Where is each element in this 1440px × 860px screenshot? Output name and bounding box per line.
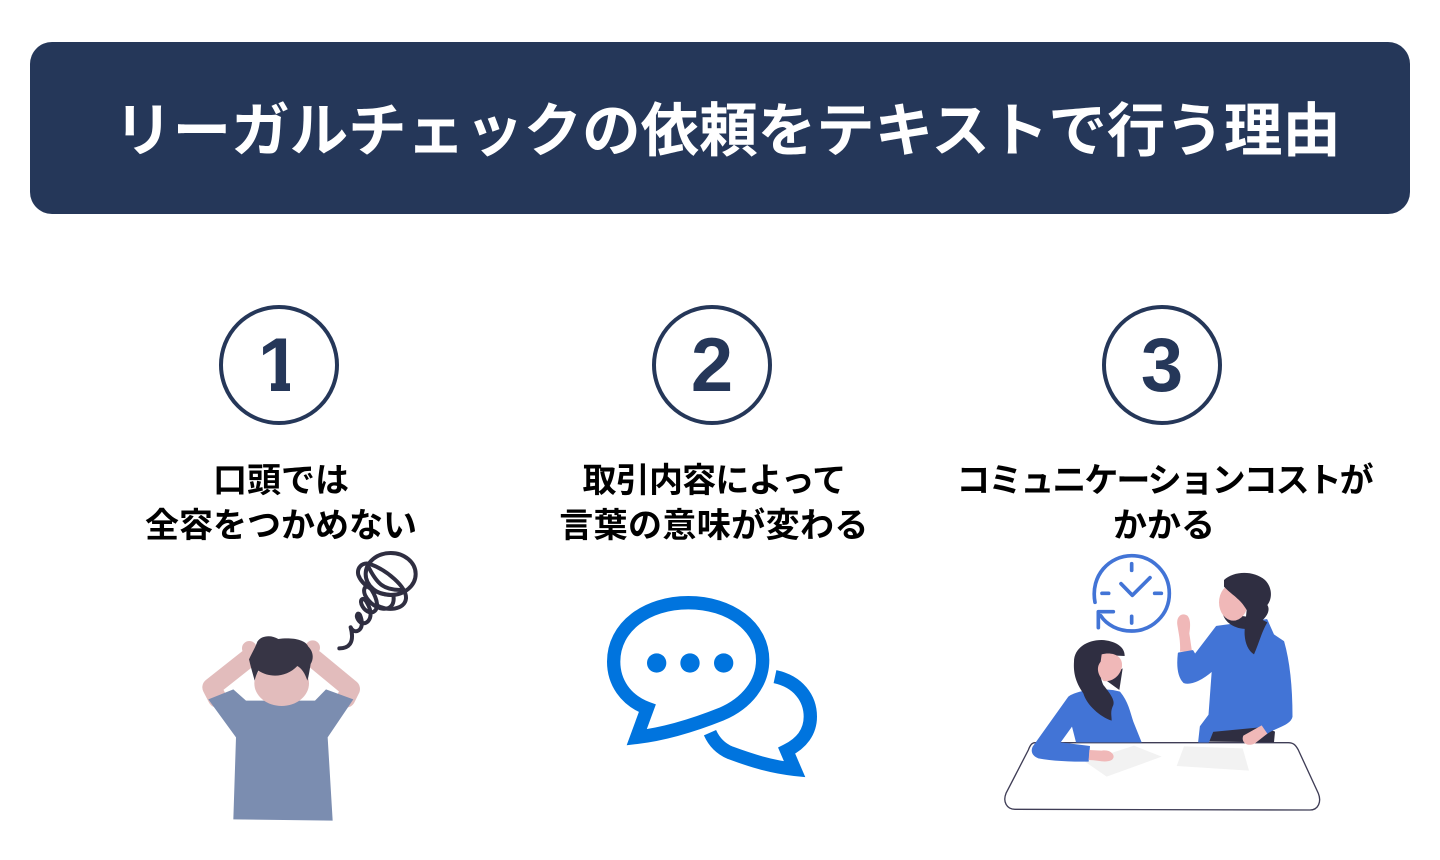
table: [1005, 743, 1320, 810]
number badge 3: 3: [1141, 323, 1183, 408]
legs: [1208, 725, 1275, 742]
number badge 1: 1: [258, 323, 300, 408]
label 2: [559, 462, 869, 545]
large bubble: [614, 603, 763, 737]
hand: [1243, 725, 1267, 745]
icon: speech bubbles: [614, 603, 810, 769]
label 3: かかる: [1113, 507, 1215, 545]
face: [1098, 653, 1122, 681]
label 1: [145, 462, 417, 545]
neck hair: [1223, 613, 1253, 629]
number badge 2: 2: [691, 323, 733, 408]
hand: [1089, 750, 1114, 761]
title banner: [30, 42, 1410, 214]
dots: [647, 653, 733, 673]
hands: [242, 640, 320, 656]
arms: [212, 658, 351, 698]
standing woman: [1177, 573, 1292, 745]
raised hand: [1177, 614, 1192, 652]
scribble: [339, 553, 416, 648]
body: [1178, 620, 1292, 742]
label 1: 全容をつかめない: [145, 507, 417, 545]
clock: [1094, 556, 1169, 631]
title: リーガルチェックの依頼をテキストで行う理由: [114, 99, 1341, 164]
face: [254, 661, 309, 706]
shirt: [208, 689, 353, 821]
icon: confused person: [208, 553, 416, 821]
label 2: 取引内容によって: [583, 462, 845, 500]
number badge 3: [1102, 305, 1222, 425]
hair: [1074, 640, 1125, 721]
neck hair: [1103, 668, 1123, 690]
label 2: 言葉の意味が変わる: [559, 507, 869, 545]
number badge 2: [652, 305, 772, 425]
label 1: 口頭では: [213, 462, 349, 500]
illustration: meeting with clock: [1005, 556, 1320, 810]
small bubble: [710, 677, 810, 769]
hair: [249, 636, 313, 681]
body: [1032, 689, 1142, 762]
hair: [1224, 573, 1271, 654]
face: [1219, 584, 1248, 621]
number badge 1: [219, 305, 339, 425]
label 3: [956, 462, 1373, 545]
label 3: コミュニケーションコストが: [956, 462, 1372, 500]
papers: [1085, 746, 1162, 777]
seated woman: [1032, 640, 1142, 762]
